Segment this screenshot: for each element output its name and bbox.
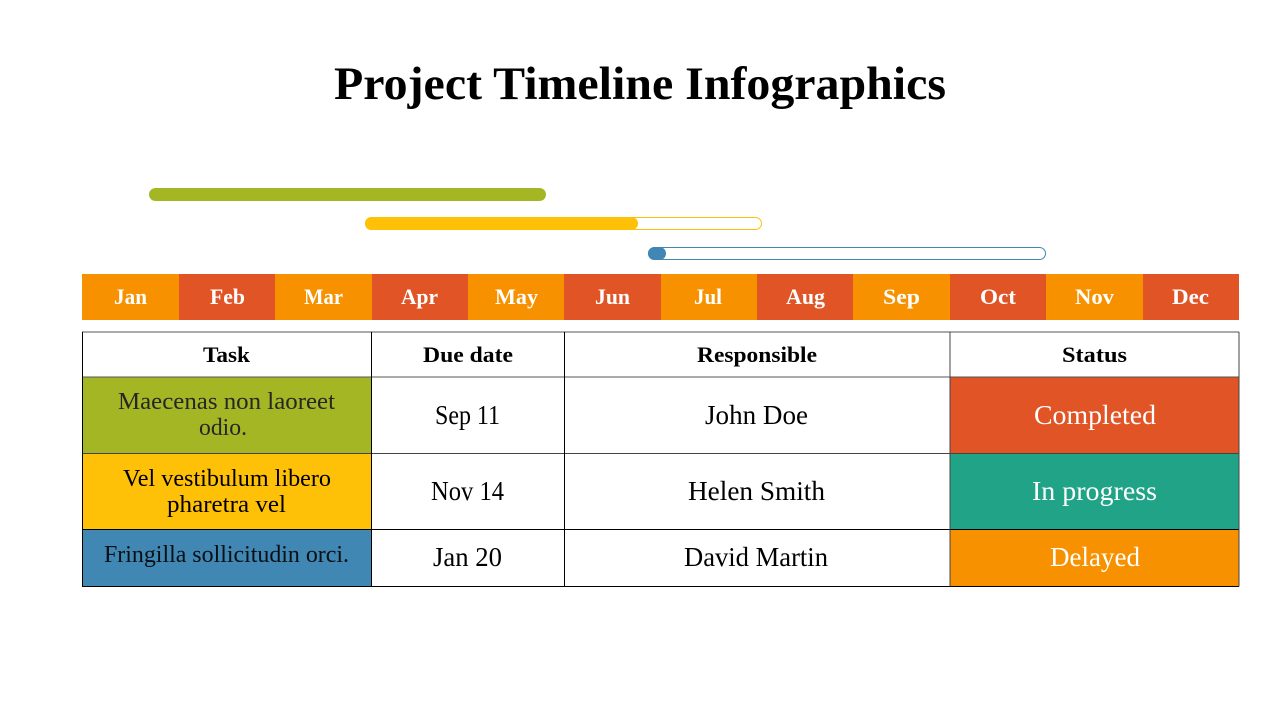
row 1: Completed xyxy=(1034,400,1157,430)
month strip: Apr xyxy=(401,284,438,309)
row 2: Vel vestibulum libero xyxy=(123,466,331,492)
row 3: Jan 20 xyxy=(433,542,502,572)
month strip: Jun xyxy=(595,284,630,309)
month strip: Jan xyxy=(114,284,147,309)
row 3: Delayed xyxy=(1050,542,1140,572)
table header xyxy=(82,332,1239,377)
month strip: Aug xyxy=(786,284,825,309)
row 2 xyxy=(82,454,1239,530)
row 1 xyxy=(82,377,1239,454)
month strip: Jul xyxy=(694,284,722,309)
row 3 xyxy=(82,530,1239,586)
bar: task 2 in progress xyxy=(365,217,762,230)
row 1: odio. xyxy=(199,415,247,441)
month strip: Mar xyxy=(304,284,343,309)
month strip xyxy=(82,274,1239,320)
month strip: Dec xyxy=(1172,284,1209,309)
title: Project Timeline Infographics xyxy=(334,58,946,110)
month strip: May xyxy=(495,284,538,309)
row 2: In progress xyxy=(1032,476,1157,506)
row 1: John Doe xyxy=(705,400,808,430)
table header: Due date xyxy=(423,342,513,367)
month strip: Nov xyxy=(1075,284,1114,309)
row 1: Maecenas non laoreet xyxy=(118,389,335,415)
table header: Responsible xyxy=(697,342,817,367)
task table xyxy=(82,332,1239,586)
table header: Task xyxy=(203,342,251,367)
month strip: Sep xyxy=(883,284,920,309)
row 2: Helen Smith xyxy=(688,476,825,506)
month strip: Oct xyxy=(980,284,1017,309)
gantt bars xyxy=(149,188,1046,260)
bar: task 3 delayed xyxy=(648,247,1046,260)
row 1: Sep 11 xyxy=(435,400,500,430)
row 3: David Martin xyxy=(684,542,828,572)
table header: Status xyxy=(1062,342,1127,367)
month strip: Feb xyxy=(210,284,245,309)
bar: task 1 complete xyxy=(149,188,546,201)
row 2: Nov 14 xyxy=(431,476,504,506)
row 2: pharetra vel xyxy=(167,492,286,518)
row 3: Fringilla sollicitudin orci. xyxy=(104,542,349,568)
